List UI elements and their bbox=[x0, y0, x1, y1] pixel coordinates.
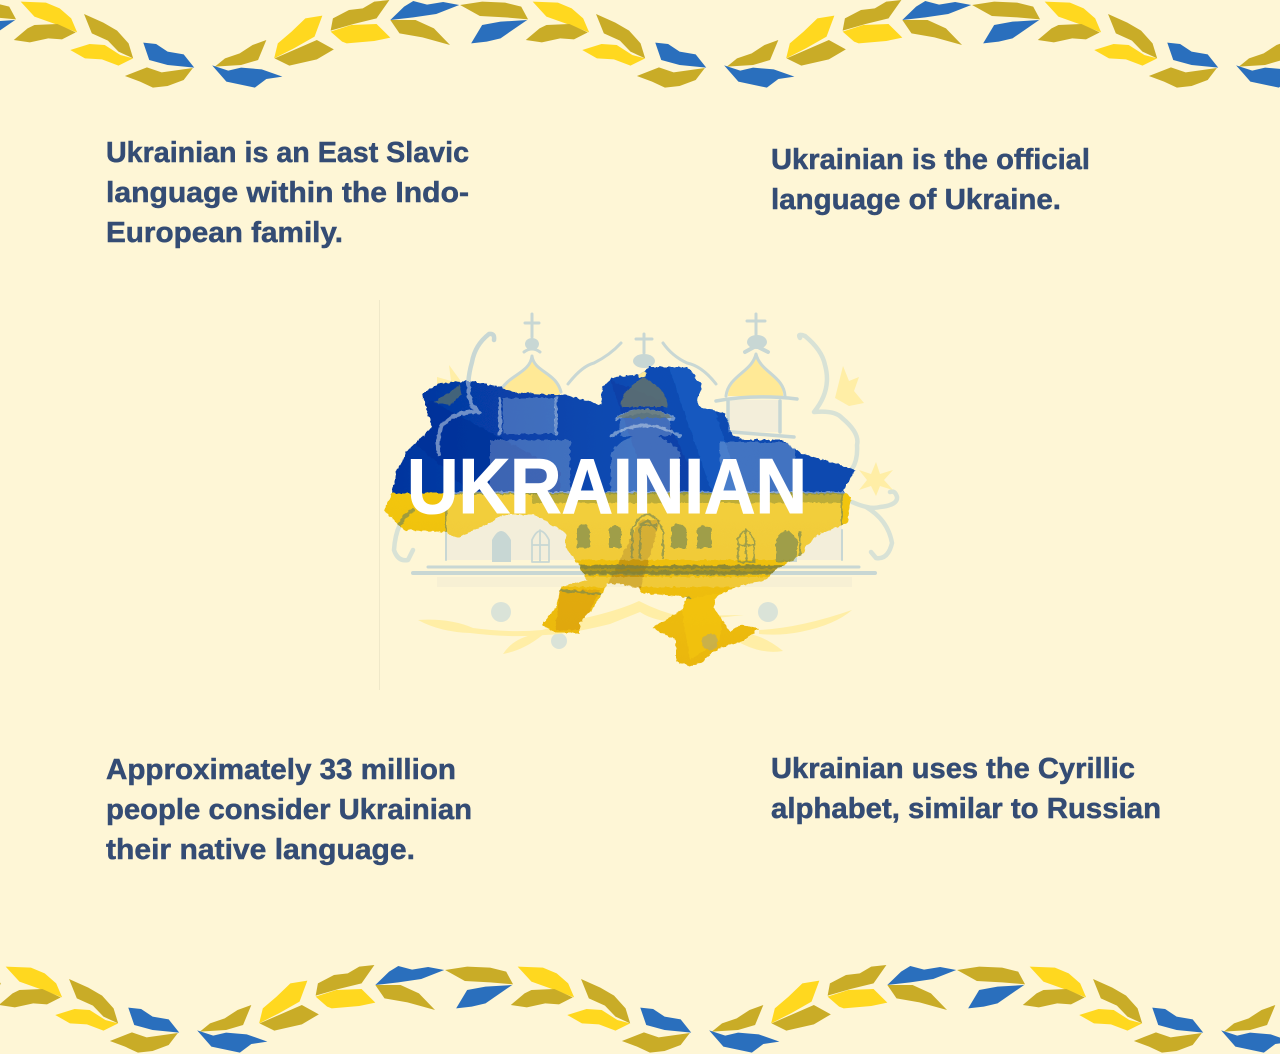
text block: native speakers: Approximately 33 million bbox=[106, 754, 456, 786]
title: UKRAINIAN bbox=[407, 442, 807, 530]
text block: native speakers: people consider Ukrainian bbox=[106, 794, 472, 826]
text block: official language: Ukrainian is the official bbox=[771, 144, 1090, 176]
central illustration: map of Ukraine with church bbox=[370, 300, 910, 690]
text block: language family: European family. bbox=[106, 217, 343, 249]
text block: language family: language within the Indo- bbox=[106, 177, 469, 209]
bottom leaf border bbox=[0, 965, 1280, 1053]
text block: native speakers: their native language. bbox=[106, 834, 415, 866]
text block: alphabet bbox=[771, 753, 1161, 825]
text block: language family bbox=[106, 137, 469, 249]
church overlay on blue bbox=[435, 380, 844, 494]
church overlay on yellow bbox=[397, 492, 844, 600]
yellow floral decoration bbox=[418, 365, 893, 654]
flag map bbox=[384, 366, 856, 666]
church line art behind map bbox=[394, 314, 897, 649]
text block: official language: language of Ukraine. bbox=[771, 184, 1061, 216]
text block: alphabet: alphabet, similar to Russian bbox=[771, 793, 1161, 825]
text block: language family: Ukrainian is an East Slavic bbox=[106, 137, 469, 169]
text block: native speakers bbox=[106, 754, 472, 866]
text block: official language bbox=[771, 144, 1090, 216]
top leaf border bbox=[0, 0, 1280, 88]
text block: alphabet: Ukrainian uses the Cyrillic bbox=[771, 753, 1135, 785]
